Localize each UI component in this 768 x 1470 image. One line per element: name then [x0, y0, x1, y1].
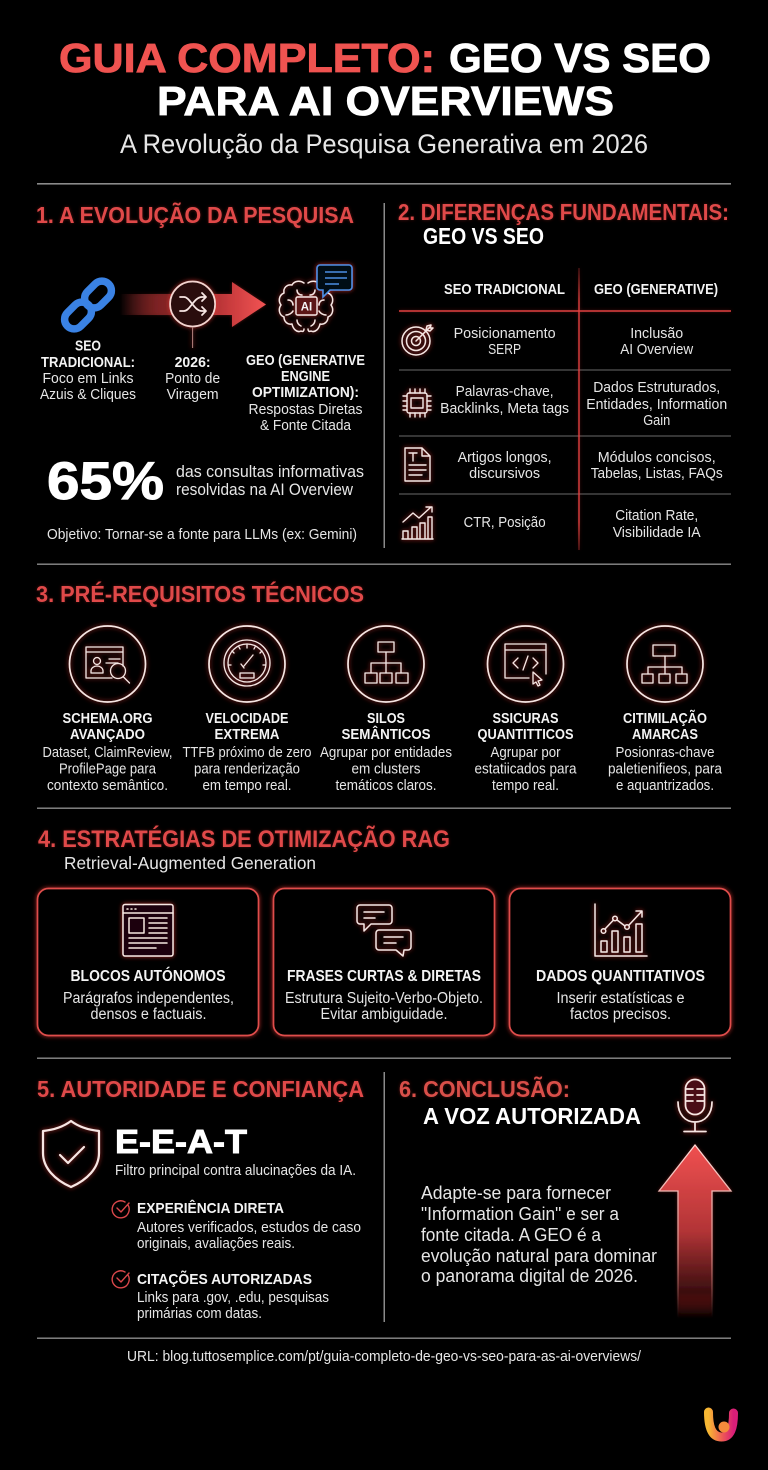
icon: growth chart	[402, 507, 433, 539]
label: GEO	[246, 352, 365, 434]
card text	[536, 968, 705, 1023]
label: GEO: OPTIMIZATION):	[252, 384, 359, 401]
table header: GEO (GENERATIVE)	[594, 281, 718, 298]
label: SEO tradicional: SEO	[75, 338, 101, 354]
heading 3: 3. PRÉ-REQUISITOS TÉCNICOS	[36, 580, 364, 607]
conclusion text	[421, 1183, 657, 1286]
row: positioning: Posicionamento	[454, 325, 556, 342]
item: quantitative: tempo real.	[492, 778, 559, 794]
card text	[63, 967, 234, 1023]
item: silos: temáticos claros.	[336, 778, 436, 794]
row: keywords: Palavras-chave,	[456, 383, 554, 400]
panel: section 6 conclusion	[399, 1075, 731, 1318]
item: direct experience: originais, avaliações reais.	[137, 1236, 295, 1252]
conclusion text: o panorama digital de 2026.	[421, 1266, 638, 1286]
row: keywords: Gain	[643, 412, 670, 429]
heading 4	[38, 825, 450, 873]
item: direct experience	[137, 1199, 361, 1252]
stat description	[176, 463, 364, 499]
item: silos: em clusters	[352, 762, 420, 778]
panel: section 1 evolution	[36, 201, 365, 543]
icon: target	[402, 325, 433, 355]
panel: section 4 RAG strategies	[38, 825, 730, 1036]
icon: AI brain with chat bubble: AI	[301, 302, 312, 314]
item: authoritative citations: CITAÇÕES AUTORIZADAS	[137, 1270, 312, 1288]
logo	[708, 1412, 734, 1437]
stat: 65%: 65%	[47, 452, 164, 511]
item: silos: SEMÂNTICOS	[342, 725, 431, 743]
card text: densos e factuais.	[90, 1006, 206, 1023]
item: citation: AMARCAS	[632, 727, 698, 743]
item: schema: Dataset, ClaimReview,	[42, 745, 172, 761]
title line 1: GUIA COMPLETO:	[59, 35, 435, 81]
heading 5: 5. AUTORIDADE E CONFIANÇA	[37, 1076, 364, 1102]
icon: gauge	[209, 626, 285, 702]
item: authoritative citations: Links para .gov, .edu, pesquisas	[137, 1290, 329, 1306]
conclusion text: evolução natural para dominar	[421, 1246, 657, 1266]
card text: BLOCOS AUTÓNOMOS	[70, 967, 226, 985]
title line 1: GEO VS SEO	[449, 35, 711, 81]
card text: DADOS QUANTITATIVOS	[536, 968, 705, 985]
row: metrics: Citation Rate,	[615, 507, 698, 524]
row: metrics: CTR, Posição	[464, 514, 546, 531]
E-E-A-T heading: E-E-A-T	[115, 1123, 247, 1160]
icon: hierarchy	[627, 626, 703, 702]
item: schema: contexto semântico.	[47, 778, 168, 794]
conclusion text: "Information Gain" e ser a	[421, 1204, 620, 1224]
heading 2: GEO VS SEO	[423, 223, 544, 249]
item: speed	[182, 711, 312, 794]
item: schema: AVANÇADO	[70, 727, 145, 743]
heading 6: A VOZ AUTORIZADA	[423, 1103, 641, 1129]
row: metrics	[464, 507, 701, 541]
item: quantitative: estatiicados para	[474, 762, 577, 778]
row: positioning: SERP	[488, 341, 521, 358]
heading 2	[398, 199, 729, 249]
row: content: discursivos	[469, 465, 540, 482]
row: positioning	[454, 325, 693, 358]
label: 2026: Viragem	[167, 386, 219, 403]
item: quantitative	[474, 711, 577, 794]
icon: code window	[488, 626, 564, 702]
heading 1: 1. A EVOLUÇÃO DA PESQUISA	[36, 201, 354, 228]
title block	[59, 35, 711, 159]
panel: section 3 technical prerequisites	[36, 580, 723, 794]
subtitle: A Revolução da Pesquisa Generativa em 2026	[120, 129, 648, 159]
title line 2: PARA AI OVERVIEWS	[157, 78, 614, 124]
item: speed: em tempo real.	[202, 778, 292, 794]
item: silos: Agrupar por entidades	[320, 745, 452, 761]
item: citation: Posionras-chave	[616, 745, 714, 761]
item: direct experience: EXPERIÊNCIA DIRETA	[137, 1199, 284, 1217]
item: speed: TTFB próximo de zero	[182, 745, 312, 761]
row: metrics: Visibilidade IA	[613, 524, 701, 541]
label: GEO: Respostas Diretas	[248, 401, 362, 418]
icon: chip	[403, 389, 431, 417]
heading 2: 2. DIFERENÇAS FUNDAMENTAIS:	[398, 199, 729, 225]
icon: shield	[43, 1121, 99, 1187]
card: quantitative data	[510, 888, 730, 1036]
row: positioning: Inclusão	[630, 325, 683, 342]
card: autonomous blocks	[38, 888, 258, 1036]
icon: schema	[70, 626, 146, 702]
row: keywords	[440, 379, 727, 429]
icon: silos	[348, 626, 424, 702]
panel: section 2 differences	[398, 199, 731, 550]
card: short sentences	[274, 888, 494, 1036]
footer URL: URL: blog.tuttosemplice.com/pt/guia-completo-de-geo-vs-seo-para-as-ai-overviews/	[127, 1349, 642, 1365]
heading 4: 4. ESTRATÉGIAS DE OTIMIZAÇÃO RAG	[38, 825, 450, 853]
item: authoritative citations: primárias com datas.	[137, 1306, 262, 1322]
icon: microphone	[678, 1080, 712, 1132]
icon: chat bubbles	[357, 905, 411, 956]
item: citation: e aquantrizados.	[616, 778, 714, 794]
label: GEO: & Fonte Citada	[260, 417, 352, 434]
icon: check 2	[112, 1271, 129, 1288]
card text: Parágrafos independentes,	[63, 990, 234, 1007]
item: authoritative citations	[137, 1270, 329, 1322]
card text	[285, 968, 483, 1023]
conclusion text: Adapte-se para fornecer	[421, 1183, 611, 1203]
icon: shuffle circle	[170, 282, 215, 348]
item: speed: VELOCIDADE	[206, 711, 289, 727]
icon: bar and line chart	[595, 904, 647, 956]
row: content: Tabelas, Listas, FAQs	[591, 465, 723, 482]
row: content: Módulos concisos,	[598, 449, 716, 466]
item: speed: para renderização	[194, 762, 300, 778]
label: SEO tradicional: Foco em Links	[42, 370, 134, 387]
row: keywords: Backlinks, Meta tags	[440, 400, 569, 417]
heading 6	[399, 1075, 641, 1129]
label: 2026: Ponto de	[165, 370, 220, 387]
label: GEO: ENGINE	[281, 368, 330, 385]
card text: Evitar ambiguidade.	[320, 1006, 448, 1023]
row: content: Artigos longos,	[458, 449, 552, 466]
icon: AI brain with chat bubble	[279, 265, 352, 332]
item: citation: CITIMILAÇÃO	[623, 709, 707, 727]
item: schema: SCHEMA.ORG	[62, 711, 152, 727]
conclusion text: fonte citada. A GEO é a	[421, 1225, 602, 1245]
item: quantitative: Agrupar por	[490, 745, 561, 761]
label: SEO tradicional: TRADICIONAL:	[41, 354, 135, 371]
label: 2026	[165, 354, 220, 403]
item: silos	[320, 711, 452, 794]
card text: Inserir estatísticas e	[556, 990, 684, 1007]
row: keywords: Dados Estruturados,	[593, 379, 720, 396]
arrow: evolution	[120, 282, 266, 327]
table header: SEO TRADICIONAL	[444, 281, 565, 298]
label: 2026: 2026:	[175, 354, 211, 371]
item: speed: EXTREMA	[214, 727, 280, 743]
row: keywords: Entidades, Information	[586, 396, 727, 413]
label: GEO: GEO (GENERATIVE	[246, 352, 365, 369]
E-E-A-T description: Filtro principal contra alucinações da IA.	[115, 1162, 356, 1179]
icon: blue chain link	[61, 277, 115, 333]
label: SEO tradicional: Azuis & Cliques	[40, 386, 136, 403]
stat description: das consultas informativas	[176, 463, 364, 481]
row: positioning: AI Overview	[620, 341, 693, 358]
heading 4: Retrieval-Augmented Generation	[64, 853, 316, 873]
arrow: upward	[659, 1145, 731, 1318]
table header	[444, 281, 718, 298]
item: schema	[42, 711, 172, 794]
heading 6: 6. CONCLUSÃO:	[399, 1075, 570, 1102]
row: content	[458, 449, 723, 482]
card text: factos precisos.	[570, 1006, 671, 1023]
panel: section 5 authority	[37, 1076, 364, 1322]
icon: article window	[123, 904, 173, 956]
item: silos: SILOS	[367, 711, 405, 727]
card text: Estrutura Sujeito-Verbo-Objeto.	[285, 990, 483, 1007]
item: direct experience: Autores verificados, estudos de caso	[137, 1220, 361, 1236]
objective: Objetivo: Tornar-se a fonte para LLMs (ex: Gemini)	[47, 526, 357, 543]
item: schema: ProfilePage para	[59, 762, 157, 778]
title line 1	[59, 35, 711, 81]
item: quantitative: SSICURAS	[492, 711, 559, 727]
item: citation	[608, 709, 723, 794]
stat description: resolvidas na AI Overview	[176, 481, 353, 499]
label: SEO tradicional	[40, 338, 136, 403]
icon: check 1	[112, 1201, 129, 1218]
item: quantitative: QUANTITTICOS	[478, 727, 574, 743]
icon: document	[405, 448, 430, 481]
table grid	[399, 268, 731, 550]
card text: FRASES CURTAS & DIRETAS	[287, 968, 481, 985]
item: citation: paletienifieos, para	[608, 762, 723, 778]
